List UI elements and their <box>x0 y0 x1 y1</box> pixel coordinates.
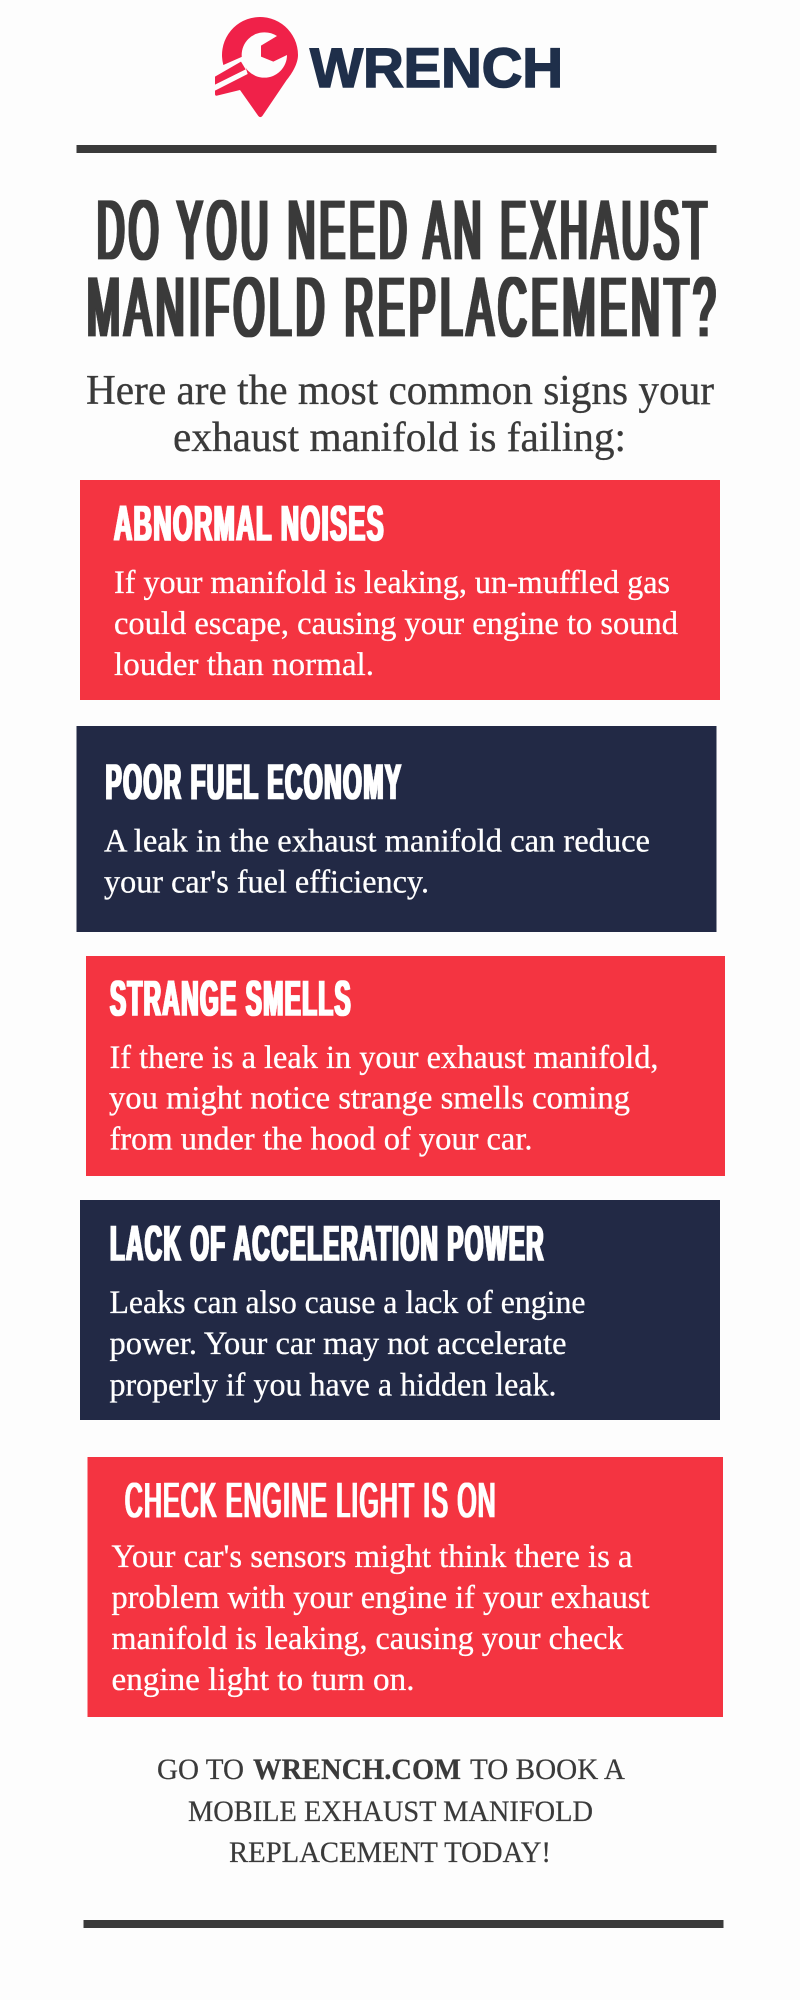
title <box>87 183 720 354</box>
panel: poor fuel economy: POOR FUEL ECONOMY <box>106 754 402 810</box>
text: poor fuel economy <box>104 824 650 900</box>
text: strange smells <box>109 1040 658 1158</box>
panel: strange smells: STRANGE SMELLS <box>110 970 352 1026</box>
call to action <box>157 1753 625 1869</box>
text: check engine light <box>112 1539 650 1698</box>
panel: check engine light <box>88 1457 723 1717</box>
logo: Wrench <box>215 17 563 117</box>
text: check engine light: problem with your engine if your exhaust <box>112 1580 650 1616</box>
text: lack of acceleration power: power. Your car may not accelerate <box>110 1326 566 1362</box>
panel: lack of acceleration power <box>80 1200 720 1420</box>
panel: strange smells <box>86 956 725 1176</box>
text: check engine light: Your car's sensors might think there is a <box>112 1539 633 1575</box>
subtitle <box>86 368 714 461</box>
call to action: WRENCH.COM <box>253 1753 461 1786</box>
text: poor fuel economy: A leak in the exhaust manifold can reduce <box>104 824 650 860</box>
panel: poor fuel economy <box>76 726 716 932</box>
text: strange smells: from under the hood of your car. <box>110 1122 532 1158</box>
top divider <box>76 145 716 153</box>
text: strange smells: you might notice strange smells coming <box>109 1080 630 1116</box>
text: lack of acceleration power: properly if you have a hidden leak. <box>110 1368 556 1404</box>
logo wordmark: WRENCH <box>310 36 563 99</box>
text: check engine light: manifold is leaking, causing your check <box>112 1621 624 1657</box>
panel: abnormal noises <box>80 480 720 700</box>
call to action: MOBILE EXHAUST MANIFOLD <box>188 1795 593 1828</box>
text: poor fuel economy: your car's fuel efficiency. <box>104 864 429 900</box>
bottom divider <box>84 1920 724 1928</box>
call to action: TO BOOK A <box>470 1753 625 1786</box>
text: abnormal noises: could escape, causing your engine to sound <box>114 606 678 642</box>
subtitle: Here are the most common signs your <box>86 368 714 414</box>
text: abnormal noises: louder than normal. <box>114 647 374 683</box>
call to action: GO TO <box>157 1753 244 1786</box>
text: check engine light: engine light to turn on. <box>112 1662 414 1698</box>
text: abnormal noises <box>114 565 678 683</box>
subtitle: exhaust manifold is failing: <box>173 415 626 461</box>
heading: abnormal noises: ABNORMAL NOISES <box>114 496 385 552</box>
call to action: REPLACEMENT TODAY! <box>229 1836 551 1869</box>
text: lack of acceleration power <box>110 1285 586 1404</box>
text: strange smells: If there is a leak in your exhaust manifold, <box>110 1040 658 1076</box>
text: abnormal noises: If your manifold is leaking, un-muffled gas <box>114 565 670 601</box>
icon: map pin with wrench <box>215 17 298 117</box>
text: lack of acceleration power: Leaks can also cause a lack of engine <box>110 1285 586 1321</box>
